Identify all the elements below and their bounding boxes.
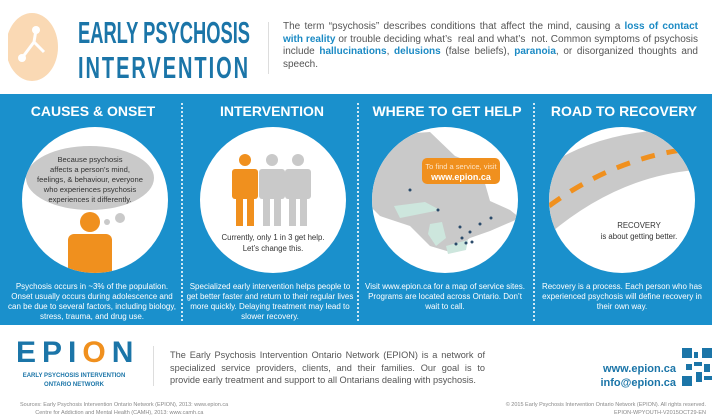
footer logo: EARLY PSYCHOSIS INTERVENTION	[23, 373, 125, 379]
illustration: Ontario map: To find a service, visit	[425, 162, 498, 171]
illustration: thought and person: Because psychosis	[57, 155, 123, 164]
illustration: road	[549, 127, 695, 273]
sources: Centre for Addiction and Mental Health (CAMH), 2013: www.camh.ca	[35, 410, 203, 416]
text: causes: Psychosis occurs in ~3% of the population. Onset usually occurs during adolescence and can be due to several factors, including biology, stress, trauma, and drug use.	[8, 282, 176, 321]
heading: road to recovery: ROAD TO RECOVERY	[551, 103, 697, 119]
text: where to get help: Visit www.epion.ca for a map of service sites. Programs are located across Ontario. Don’t wait to call.	[365, 282, 525, 311]
illustration: road: is about getting better.	[601, 232, 677, 241]
footer description: The Early Psychosis Intervention Ontario Network (EPION) is a network of specialized service providers, clients, and their families. Our goal is to provide early treatment and support to all Ontarians dealing with psychosis.	[170, 350, 485, 385]
copyright: EPION-WPYOUTH-V2015OCT29-EN	[614, 410, 706, 416]
illustration: thought and person: experiences it differently.	[48, 195, 132, 204]
heading: intervention: INTERVENTION	[220, 103, 324, 119]
blue band	[0, 94, 712, 325]
illustration: Ontario map	[372, 127, 518, 273]
text: road to recovery: Recovery is a process. Each person who has experienced psychosis will define recovery in their own way.	[542, 282, 702, 311]
illustration: thought and person	[22, 127, 168, 273]
contact: info@epion.ca	[600, 377, 676, 389]
illustration: road: RECOVERY	[617, 221, 662, 230]
intro paragraph: The term “psychosis” describes conditions that affect the mind, causing a loss of contact with reality or trouble deciding what’s real and what’s not. Common symptoms of psychosis include hallucinations, delusions (false beliefs), paranoia, or disorganized thoughts and speech.	[283, 21, 698, 70]
illustration: thought and person: who experiences psychosis	[43, 185, 136, 194]
illustration: three people: Currently, only 1 in 3 get help.	[221, 233, 325, 242]
illustration: three people: Let’s change this.	[243, 244, 303, 253]
copyright	[506, 402, 706, 416]
sources: Sources: Early Psychosis Intervention Ontario Network (EPION), 2013: www.epion.ca	[20, 402, 228, 408]
contact	[600, 363, 676, 389]
QR code	[682, 348, 712, 386]
header logo	[8, 13, 58, 81]
illustration: thought and person: feelings, & behaviour, everyone	[37, 175, 143, 184]
sources	[20, 402, 228, 416]
heading: where to get help: WHERE TO GET HELP	[372, 103, 522, 119]
footer logo: EPION	[16, 336, 139, 369]
heading: causes: CAUSES & ONSET	[31, 103, 155, 119]
text: intervention: Specialized early intervention helps people to get better faster and return to their regular lives more quickly. Delaying treatment may lead to slower recovery.	[187, 282, 353, 321]
footer logo	[16, 336, 139, 388]
illustration: three people	[200, 127, 346, 273]
illustration: Ontario map: www.epion.ca	[430, 172, 492, 182]
illustration: thought and person: affects a person’s mind,	[50, 165, 130, 174]
contact: www.epion.ca	[603, 363, 676, 375]
copyright: © 2015 Early Psychosis Intervention Ontario Network (EPION). All rights reserved.	[506, 402, 706, 408]
footer logo: ONTARIO NETWORK	[44, 382, 104, 388]
title	[78, 15, 250, 85]
